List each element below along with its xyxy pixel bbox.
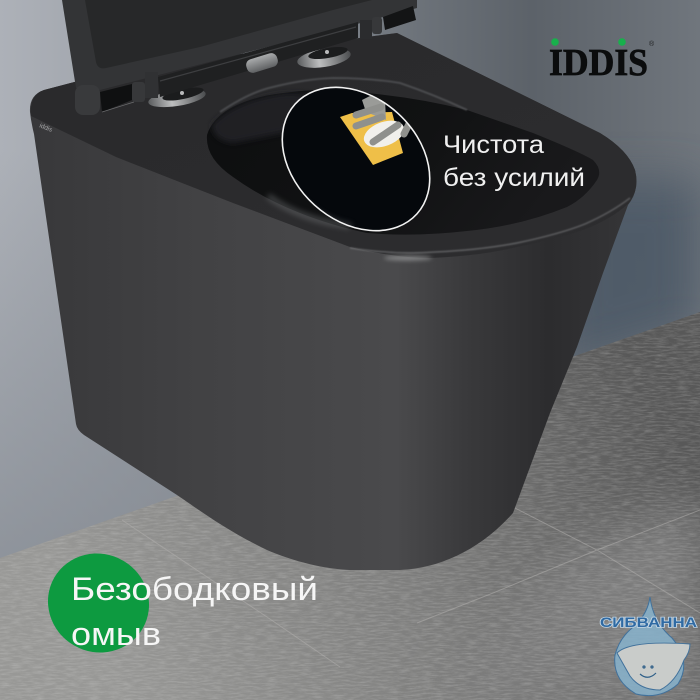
bath [617,643,690,690]
face [640,666,656,677]
water drop [615,597,684,696]
right chrome disc [296,45,352,71]
sponge [340,112,403,165]
lid frame [62,0,417,90]
deck surface [31,33,636,258]
floor tiles [0,312,700,700]
seat bar [158,22,358,97]
bar highlight [160,27,356,81]
callout: cleaning detail [281,86,431,232]
callout text: Чистота [443,131,544,159]
feature heading: омыв [71,616,161,652]
right hinge [360,6,416,39]
oval outline [254,58,458,260]
toilet seat lid [62,0,417,115]
feature badge: green circle [30,535,167,671]
logo: IDDIS: IDDIS [549,42,648,84]
left chrome disc [147,85,207,110]
chrome button [245,52,279,74]
bowl lit lower left [268,196,350,226]
sponge and glove [340,95,410,165]
feature heading [71,571,318,652]
watermark: Sibvanna logo [600,597,697,696]
detail oval background [254,58,458,260]
toilet body [30,33,636,570]
bowl upper shelf [212,93,330,143]
rim highlight [350,198,630,253]
left hinge [75,72,158,115]
bowl top rim highlight [220,78,467,112]
chrome fittings [147,45,352,110]
callout text: без усилий [443,164,585,192]
small brand mark: iddis [38,122,54,134]
glove palm [362,95,386,120]
callout text [443,131,585,192]
glove fingers [356,107,410,142]
logo: IDDIS: ® [649,40,655,48]
lid inner panel [85,0,372,68]
toilet ceramic silhouette [30,33,636,570]
brand text: СИБВАННА [600,614,697,630]
oval lower glow [320,208,354,226]
bowl recess [207,90,599,235]
foam [364,120,404,148]
rim bright spot [384,256,432,260]
feature heading: Безободковый [71,571,318,607]
